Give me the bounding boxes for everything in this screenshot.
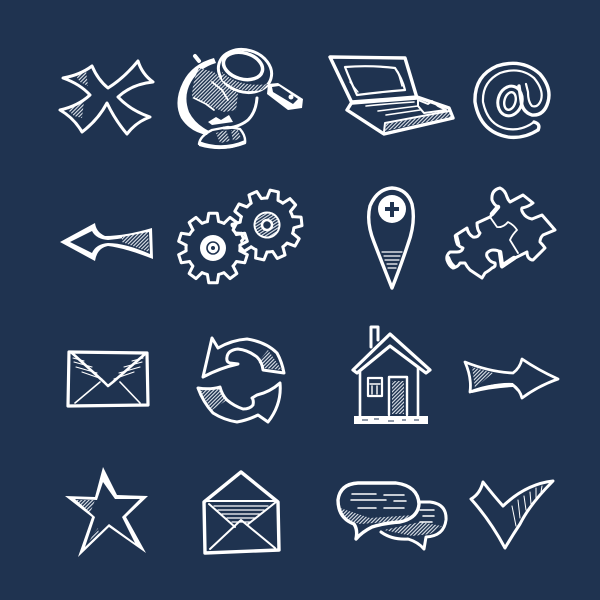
icon: speech bubbles [338, 483, 446, 549]
gear right [224, 183, 310, 267]
bottom arrow [198, 383, 280, 422]
back bubble [381, 502, 446, 549]
icon: puzzle pieces [447, 188, 555, 278]
icon: map pin [369, 188, 413, 288]
top arrow [203, 338, 284, 377]
icon: star [65, 467, 148, 557]
icon: sealed envelope [68, 352, 148, 406]
magnifier [213, 43, 303, 110]
gear left [177, 213, 249, 283]
icon: check mark [471, 481, 553, 548]
icon: sync arrows [198, 338, 284, 422]
icon: at sign [475, 63, 549, 137]
icon: open envelope [204, 472, 279, 553]
icon: house [353, 327, 430, 424]
icon: cross [60, 61, 153, 134]
icon: left arrow [60, 223, 153, 261]
icon: laptop [330, 57, 453, 134]
globe sphere and stand [177, 56, 257, 149]
icon: globe with magnifier [177, 43, 303, 149]
icon: gears [177, 183, 310, 283]
front bubble [338, 483, 419, 539]
icon: right arrow [465, 359, 558, 398]
